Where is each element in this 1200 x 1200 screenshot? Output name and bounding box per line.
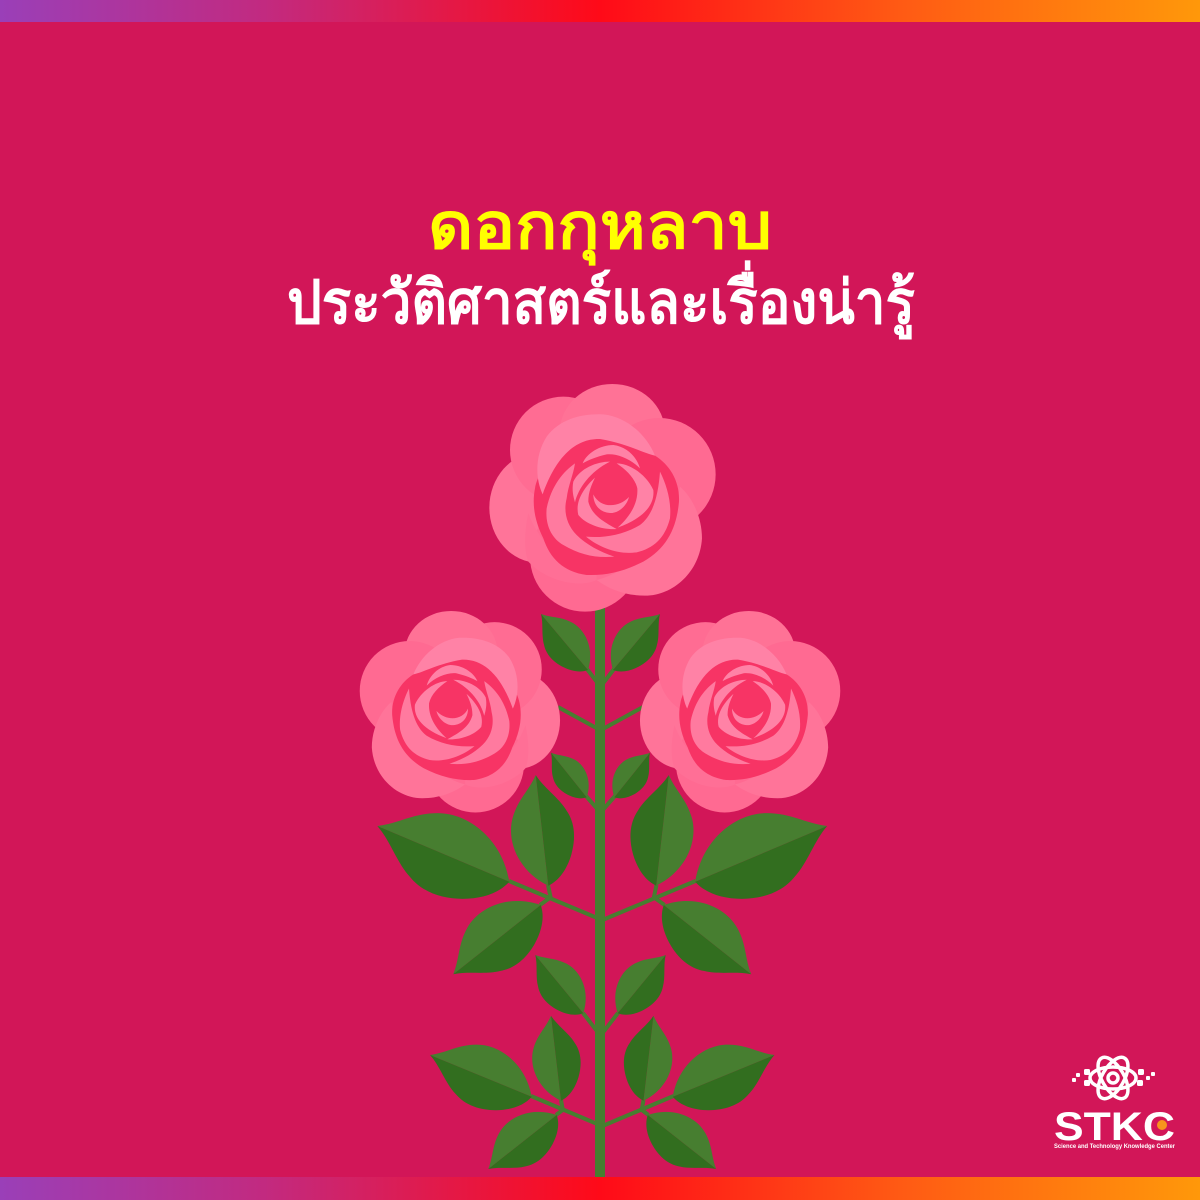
icon: dots xyxy=(1072,1069,1155,1086)
left lower leaves xyxy=(362,771,602,1188)
logo orange dot xyxy=(1157,1120,1167,1130)
logo: STKC xyxy=(1054,1053,1176,1150)
right lower leaves xyxy=(602,771,843,1188)
stem xyxy=(595,605,605,1177)
icon: atom xyxy=(1090,1053,1136,1103)
logo tagline: Science and Technology Knowledge Center xyxy=(1054,1144,1176,1150)
rose plant illustration xyxy=(360,384,843,1188)
logo wordmark: STKC xyxy=(1054,1105,1175,1149)
left upper leaves xyxy=(519,601,604,1035)
subtitle: ประวัติศาสตร์และเรื่องน่ารู้ xyxy=(287,260,915,340)
rose: lower right xyxy=(640,611,840,812)
title: ดอกกุหลาบ xyxy=(428,190,772,266)
rose: lower left xyxy=(360,611,560,812)
top gradient bar xyxy=(0,0,1200,22)
bottom gradient bar xyxy=(0,1177,1200,1200)
rose: top xyxy=(489,384,716,612)
right upper leaves xyxy=(597,601,682,1035)
